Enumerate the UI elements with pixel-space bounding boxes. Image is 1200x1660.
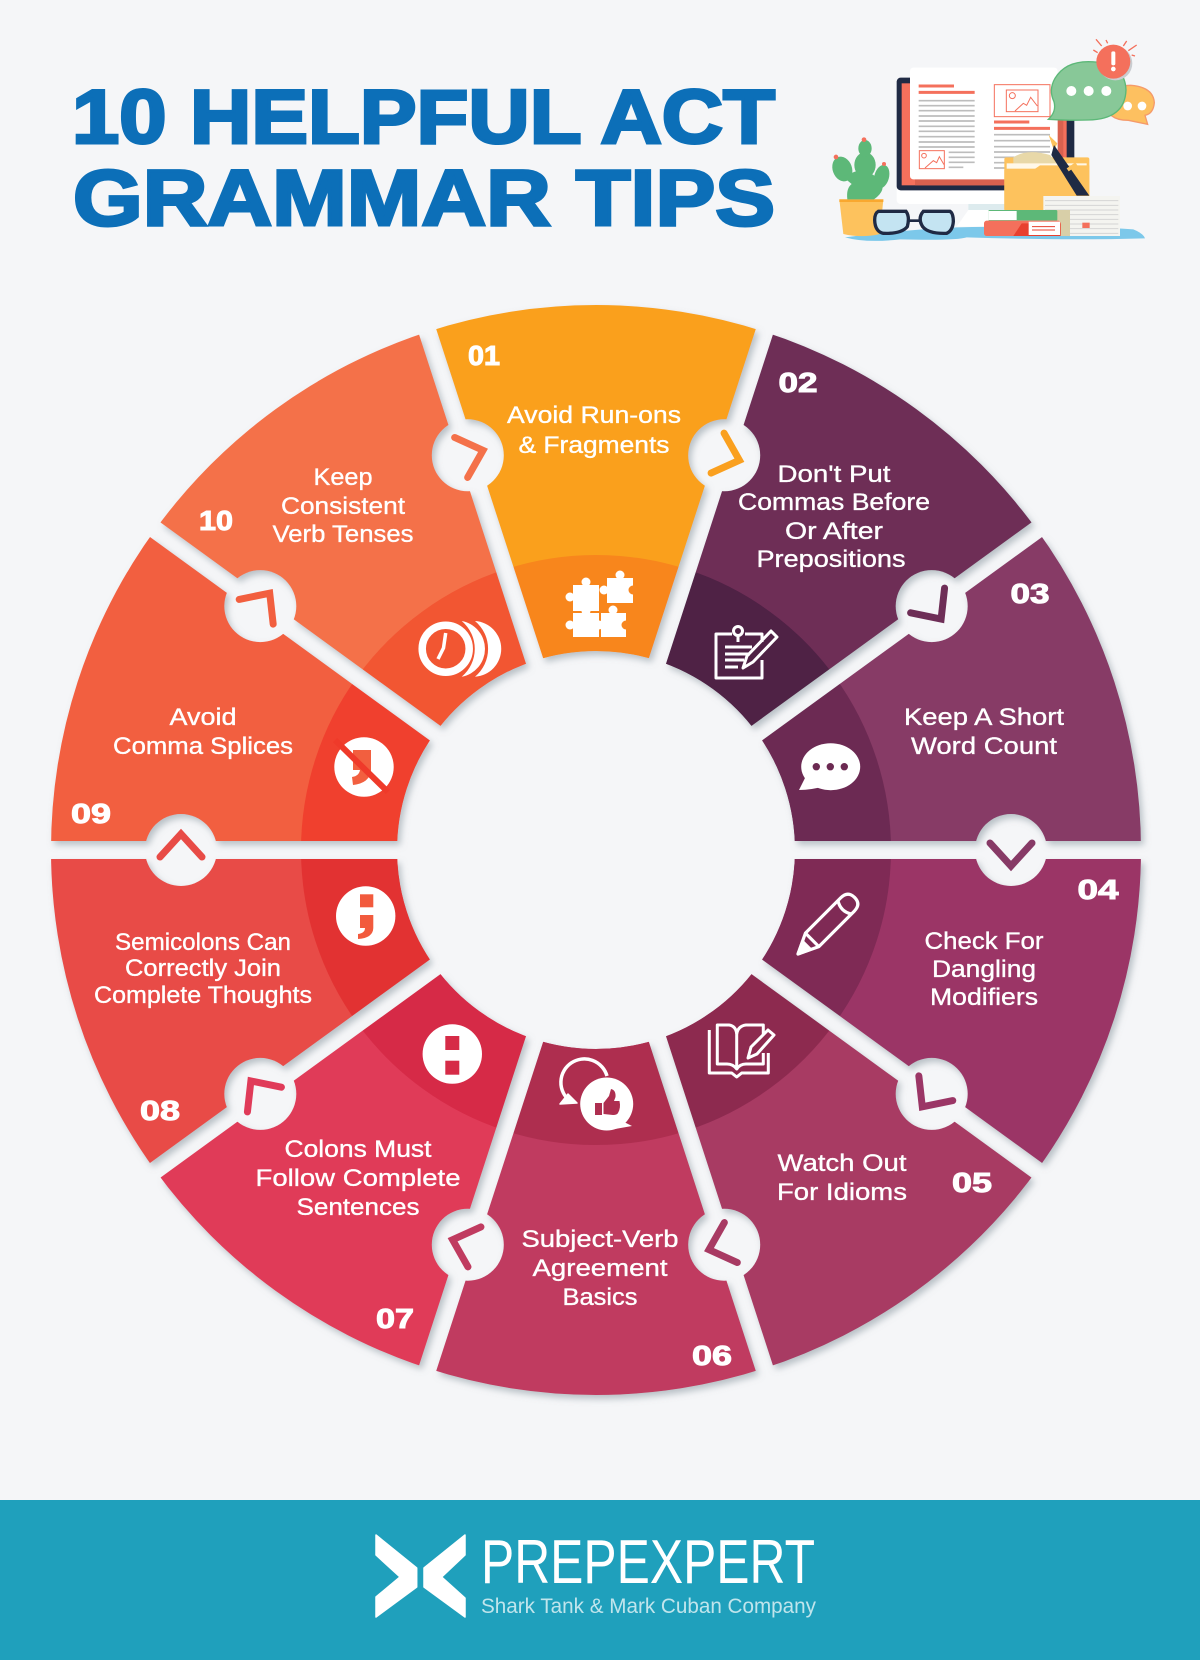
wedge 04 bbox=[757, 850, 1141, 1170]
icon: semicolon bbox=[336, 886, 395, 946]
label 02: Don't Put bbox=[778, 461, 891, 488]
panel: segment 05 bbox=[658, 967, 1037, 1368]
label 04: Modifiers bbox=[930, 984, 1038, 1011]
panel: segment 02 bbox=[658, 332, 1037, 733]
label 07: Sentences bbox=[296, 1194, 420, 1221]
label 03: Word Count bbox=[911, 733, 1057, 760]
label 05: For Idioms bbox=[777, 1179, 907, 1206]
label 02 bbox=[738, 461, 930, 573]
number 10: 10 bbox=[199, 505, 233, 536]
label 07: Colons Must bbox=[284, 1136, 432, 1163]
icon: pencil bbox=[791, 891, 861, 961]
icon: clock with echoes bbox=[422, 621, 501, 677]
number 08: 08 bbox=[140, 1095, 180, 1126]
label 02: Or After bbox=[785, 518, 883, 545]
number 04: 04 bbox=[1078, 874, 1119, 905]
label 09: Comma Splices bbox=[113, 733, 293, 760]
panel: segment 10 bbox=[155, 332, 534, 733]
number 05: 05 bbox=[952, 1167, 992, 1198]
number 09: 09 bbox=[71, 798, 111, 829]
label 04: Dangling bbox=[932, 956, 1036, 983]
number 03: 03 bbox=[1010, 578, 1050, 609]
label 06: Basics bbox=[562, 1284, 638, 1311]
label 08: Complete Thoughts bbox=[94, 982, 312, 1009]
wedge 05 bbox=[658, 967, 1037, 1368]
arrow: notch chevron magenta bbox=[905, 1076, 953, 1119]
label 01: Avoid Run-ons bbox=[507, 402, 681, 429]
label 01 bbox=[507, 402, 681, 459]
arrow: notch chevron orange-red bbox=[239, 581, 287, 624]
wedge 03 bbox=[757, 530, 1141, 850]
label 06: Subject-Verb bbox=[522, 1226, 678, 1253]
icon: puzzle pieces bbox=[566, 570, 638, 637]
wedge 02 bbox=[658, 332, 1037, 733]
label 02: Commas Before bbox=[738, 489, 930, 516]
label 05: Watch Out bbox=[778, 1150, 907, 1177]
label 04 bbox=[924, 928, 1044, 1011]
number 01: 01 bbox=[468, 340, 500, 371]
label 10: Consistent bbox=[281, 493, 405, 520]
title: 10 HELPFUL ACT bbox=[72, 75, 775, 160]
logo wordmark: PREPEXPERT bbox=[481, 1528, 815, 1597]
icon: colon bbox=[423, 1024, 482, 1084]
label 01: & Fragments bbox=[518, 432, 670, 459]
label 08: Correctly Join bbox=[125, 955, 281, 982]
number 06: 06 bbox=[692, 1340, 732, 1371]
arrow: notch chevron crimson bbox=[446, 1220, 481, 1267]
arrow: notch chevron red bbox=[160, 834, 202, 857]
label 09: Avoid bbox=[170, 704, 236, 731]
label 10: Verb Tenses bbox=[272, 521, 414, 548]
arrow: notch chevron plum bbox=[990, 843, 1032, 866]
arrow: notch chevron purple bbox=[911, 588, 958, 631]
panel: segment 04 bbox=[757, 850, 1141, 1170]
icon: notepad with pencil bbox=[716, 626, 777, 678]
label 06: Agreement bbox=[532, 1255, 668, 1282]
panel: segment 01 bbox=[428, 305, 764, 661]
label 06 bbox=[522, 1226, 678, 1311]
arrow: notch chevron orange bbox=[711, 433, 746, 480]
panel: segment 08 bbox=[51, 834, 435, 1170]
wedge 09 bbox=[51, 530, 435, 850]
label 09 bbox=[113, 704, 293, 760]
label 07: Follow Complete bbox=[256, 1165, 460, 1192]
title: GRAMMAR TIPS bbox=[73, 153, 775, 242]
tagline: Shark Tank & Mark Cuban Company bbox=[481, 1595, 816, 1618]
label 10: Keep bbox=[314, 464, 372, 491]
label 02: Prepositions bbox=[756, 546, 906, 573]
arrow: notch chevron red-pink bbox=[234, 1069, 281, 1112]
panel: segment 09 bbox=[51, 530, 435, 850]
panel: segment 07 bbox=[155, 967, 534, 1368]
wedge 08 bbox=[51, 850, 435, 1170]
panel: segment 06 bbox=[428, 1039, 764, 1395]
label 08: Semicolons Can bbox=[115, 929, 291, 956]
label 08 bbox=[94, 929, 312, 1009]
logo mark bbox=[376, 1535, 465, 1617]
wedge 10 bbox=[155, 332, 534, 733]
number 02: 02 bbox=[778, 367, 818, 398]
number 07: 07 bbox=[376, 1303, 414, 1334]
label 07 bbox=[256, 1136, 460, 1221]
footer band bbox=[0, 1500, 1200, 1660]
label 05 bbox=[777, 1150, 907, 1206]
icon: speech bubbles with thumbs up bbox=[560, 1059, 633, 1130]
title bbox=[72, 75, 775, 242]
label 03: Keep A Short bbox=[904, 704, 1064, 731]
panel: segment 03 bbox=[757, 530, 1141, 866]
label 03 bbox=[904, 704, 1064, 760]
illustration: desk with monitor, book, cactus, speech bubbles bbox=[829, 39, 1154, 241]
wedge 01 bbox=[428, 305, 764, 661]
icon: chat bubble bbox=[799, 743, 860, 790]
wedge 07 bbox=[155, 967, 534, 1368]
arrow: notch chevron rose bbox=[702, 1223, 737, 1270]
icon: open book with pen bbox=[709, 1025, 774, 1077]
arrow: notch chevron coral bbox=[455, 430, 490, 477]
label 10 bbox=[272, 464, 414, 548]
label 04: Check For bbox=[924, 928, 1044, 955]
wedge 06 bbox=[428, 1039, 764, 1395]
icon: crossed-out comma bbox=[334, 737, 394, 797]
